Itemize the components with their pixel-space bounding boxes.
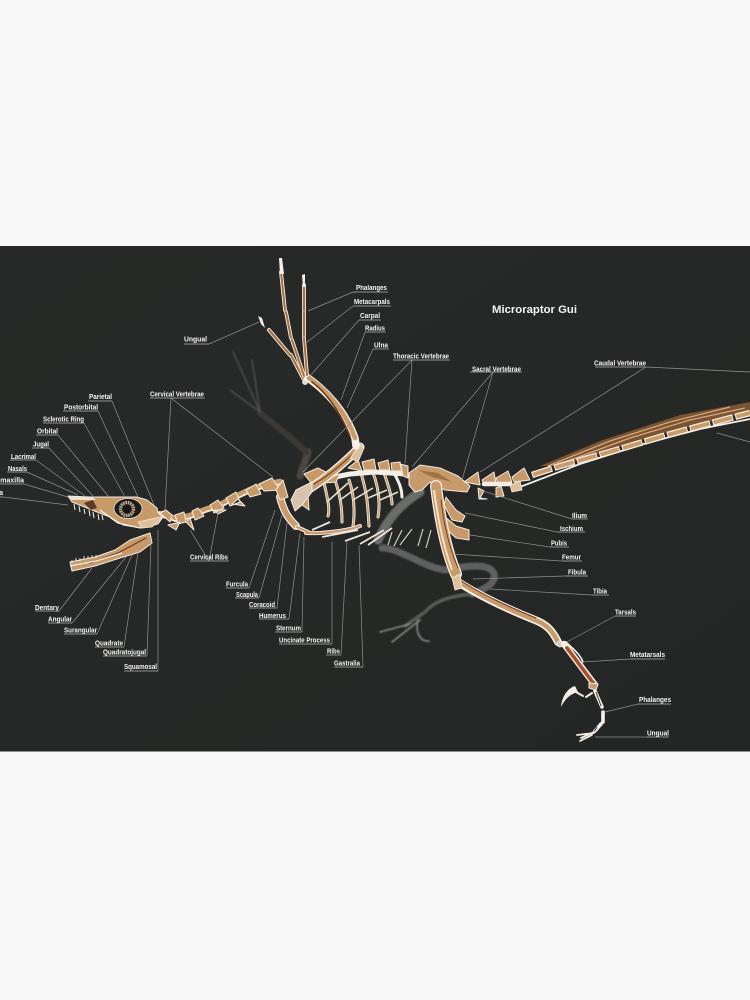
label: Ungual (foot)	[595, 730, 669, 738]
label: Postorbital	[63, 404, 138, 497]
foot: tarsals and metatarsals	[557, 641, 595, 685]
label: Sacral Vertebrae	[412, 366, 522, 480]
label: Scapula: Scapula	[236, 592, 258, 599]
label: Radius	[341, 326, 386, 400]
label: Sternum	[275, 537, 304, 632]
label: Lacrimal: Lacrimal	[11, 454, 36, 461]
label: Carpal	[310, 313, 381, 376]
pelvis: ilium	[409, 465, 470, 492]
label: Pubis: Pubis	[551, 540, 567, 548]
label: Ribs: Ribs	[327, 648, 340, 656]
label: Sternum: Sternum	[276, 626, 301, 632]
skull	[68, 496, 163, 528]
label: Furcula	[226, 510, 275, 588]
panel: dark poster background	[0, 246, 750, 752]
label: Scapula	[235, 515, 282, 599]
label: Humerus	[259, 533, 300, 620]
label: Radius: Radius	[365, 326, 385, 332]
label: Dentary: Dentary	[35, 605, 59, 612]
label: Phalanges (foot)	[605, 697, 671, 712]
label: Caudal Vertebrae: Caudal Vertebrae	[594, 360, 646, 368]
label: Coracoid	[249, 523, 287, 609]
label: Sacral Vertebrae: Sacral Vertebrae	[472, 366, 521, 374]
label: Orbital	[36, 428, 109, 497]
label: Uncinate Process: Uncinate Process	[279, 638, 330, 644]
shadow: far leg	[378, 492, 494, 642]
label: Nasals	[7, 466, 78, 495]
label: Jugal: Jugal	[33, 442, 49, 448]
label: Caudal Vertebrae	[480, 360, 750, 472]
label: Ilium	[483, 491, 588, 520]
label: Postorbital: Postorbital	[64, 404, 98, 412]
label: Thoracic Vertebrae: Thoracic Vertebrae	[393, 354, 449, 360]
label: Fibula	[473, 570, 588, 579]
label: Squamosal: Squamosal	[124, 664, 157, 671]
label: Sclerotic Ring: Sclerotic Ring	[43, 416, 84, 424]
label: Furcula: Furcula	[226, 582, 248, 588]
label: Ungual (wing)	[184, 322, 259, 344]
thoracic vertebrae	[304, 459, 408, 484]
label: Parietal: Parietal	[89, 394, 112, 401]
label: Quadrate	[95, 552, 138, 648]
label: Dentary	[35, 568, 92, 612]
foot: phalanges and unguals	[561, 683, 603, 741]
label: Phalanges (foot): Phalanges	[639, 697, 671, 704]
label: Quadrate: Quadrate	[95, 640, 123, 648]
wing: radius and ulna	[308, 378, 356, 446]
label: Parietal	[88, 394, 154, 505]
label: Cervical Vertebrae: Cervical Vertebrae	[150, 392, 204, 398]
label: Carpal: Carpal	[360, 313, 380, 320]
wing: carpals and digits	[258, 258, 308, 384]
label: Ungual (foot): Ungual	[647, 730, 669, 738]
label: Thoracic Vertebrae	[303, 354, 450, 472]
label: Surangular: Surangular	[64, 628, 97, 634]
label: Tarsals	[567, 610, 636, 642]
lower jaw	[70, 533, 152, 571]
label: Tibia: Tibia	[593, 588, 607, 596]
label: Surangular	[64, 555, 132, 634]
leg: tibia and fibula	[452, 574, 558, 642]
label: Jugal	[32, 442, 94, 497]
label: Cervical Ribs	[190, 513, 229, 562]
label: Quadratojugal	[103, 543, 151, 656]
label: Femur	[452, 554, 582, 562]
leg: femur	[434, 486, 458, 574]
label: Fibula: Fibula	[568, 570, 586, 576]
label: Tarsals: Tarsals	[615, 610, 636, 616]
label: Angular: Angular	[48, 616, 72, 624]
label: Ilium: Ilium	[572, 513, 587, 520]
scapula, coracoid and sternum	[276, 480, 392, 545]
label: Sclerotic Ring	[43, 416, 125, 497]
label: Gastralia: Gastralia	[334, 660, 360, 668]
label: Ungual (wing): Ungual	[184, 336, 207, 344]
label: Premaxilla	[0, 478, 68, 497]
label: Phalanges (wing)	[308, 285, 388, 311]
label: Coracoid: Coracoid	[249, 602, 275, 609]
ribs and uncinate processes	[324, 470, 402, 526]
shadow: far gastralia	[388, 529, 431, 548]
label: Metatarsals	[583, 652, 665, 662]
label: Uncinate Process	[279, 542, 332, 644]
label: Ischium: Ischium	[560, 526, 583, 533]
pelvis: ischium and pubis	[444, 497, 469, 540]
illustration: skeleton	[68, 258, 750, 741]
label: Lacrimal	[10, 454, 85, 496]
shadow: far wing	[230, 352, 308, 476]
neck: cervical vertebrae	[160, 478, 280, 530]
wing: humerus	[291, 445, 364, 511]
label: Nasals: Nasals	[8, 466, 27, 473]
tail: caudal vertebrae	[464, 402, 750, 499]
label: Maxilla	[0, 490, 68, 505]
label: Ribs	[326, 542, 347, 656]
title: Microraptor Gui	[492, 304, 577, 316]
label: Orbital: Orbital	[37, 428, 58, 436]
label: Ulna: Ulna	[374, 342, 388, 350]
label: Pubis	[470, 535, 569, 548]
label: Humerus: Humerus	[259, 613, 286, 620]
label: Gastralia	[334, 545, 363, 668]
label: Phalanges (wing): Phalanges	[356, 285, 387, 292]
label: Ulna	[347, 342, 389, 408]
label: Cervical Vertebrae	[150, 392, 273, 510]
label: Metacarpals	[306, 299, 391, 343]
label: Femur: Femur	[562, 554, 581, 562]
label: Quadratojugal: Quadratojugal	[103, 650, 146, 656]
label: Ischium	[465, 513, 585, 533]
label: Cervical Ribs: Cervical Ribs	[190, 554, 228, 562]
label: Metacarpals: Metacarpals	[354, 299, 390, 306]
label: Angular	[48, 557, 126, 624]
label: Metatarsals: Metatarsals	[630, 652, 665, 659]
label: Tibia	[490, 588, 609, 596]
